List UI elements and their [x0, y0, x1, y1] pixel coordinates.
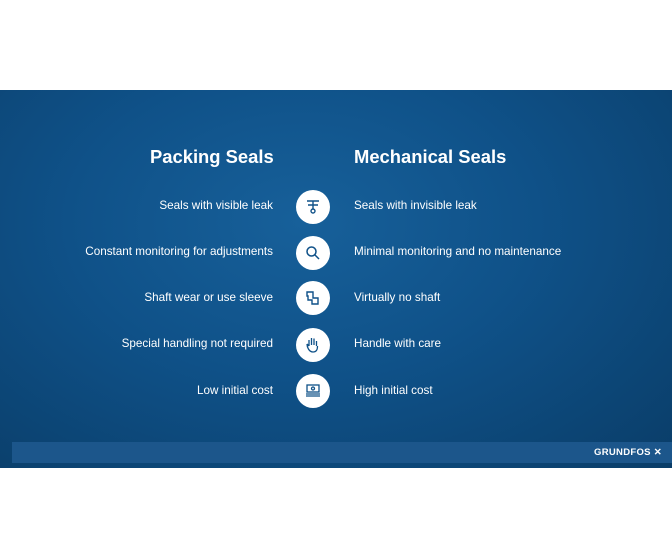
footer bar — [12, 442, 672, 463]
heading: mechanical seals: Mechanical Seals — [354, 146, 506, 167]
left text 1: Seals with visible leak — [159, 199, 273, 212]
icon: shaft — [296, 281, 330, 315]
icon: hand — [296, 328, 330, 362]
right text 3: Virtually no shaft — [354, 291, 440, 304]
right text 2: Minimal monitoring and no maintenance — [354, 245, 561, 258]
right text 4: Handle with care — [354, 337, 441, 350]
left text 3: Shaft wear or use sleeve — [144, 291, 273, 304]
right text 1: Seals with invisible leak — [354, 199, 477, 212]
icon: money — [296, 374, 330, 408]
left text 5: Low initial cost — [197, 384, 273, 397]
icon: leak — [296, 190, 330, 224]
left text 2: Constant monitoring for adjustments — [85, 245, 273, 258]
icon: magnifier — [296, 236, 330, 270]
logo: grundfos: GRUNDFOS ✕ — [594, 447, 662, 458]
right text 5: High initial cost — [354, 384, 433, 397]
panel: background — [0, 90, 672, 468]
heading: packing seals: Packing Seals — [150, 146, 274, 167]
left text 4: Special handling not required — [122, 337, 273, 350]
